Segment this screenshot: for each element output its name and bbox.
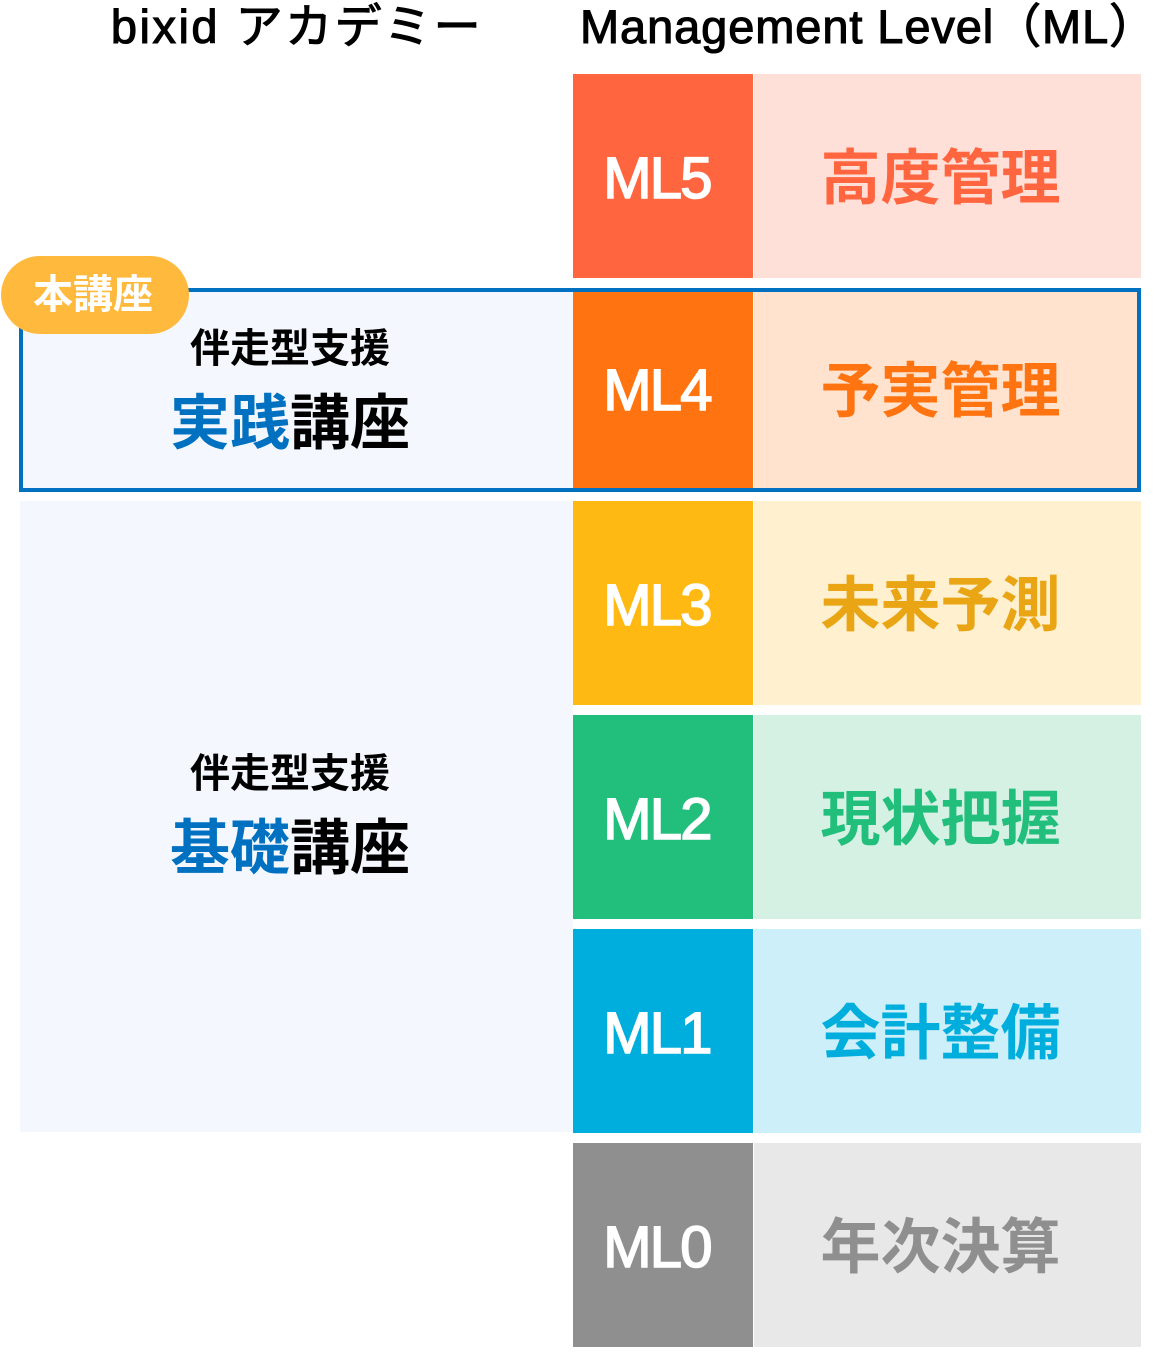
name: forecasting: 未来予測 [820,572,1060,639]
name: advanced management: 高度管理 [820,145,1060,212]
name: accounting maintenance [754,929,1141,1133]
subtitle: accompanying support: 伴走型支援 [190,327,390,371]
label: ML0 [573,1143,753,1347]
title: basic course: 基礎講座 [170,815,410,882]
name: accounting maintenance: 会計整備 [820,1000,1060,1067]
heading: management level: Management Level（ML） [580,0,1157,53]
label: ML1 [573,929,753,1133]
label: ML5: ML5 [603,146,711,211]
label: ML2 [573,715,753,919]
name: annual closing: 年次決算 [820,1214,1060,1281]
left panel: basic course background [20,501,573,1132]
name: annual closing [754,1143,1141,1347]
highlight frame around ML4 row [19,288,1141,492]
row: ML1 [573,929,1141,1133]
left panel: practical course background [20,292,573,489]
badge: this course [1,256,189,334]
badge: this course: 本講座 [33,273,153,317]
label: ML4: ML4 [603,358,711,423]
label: ML5 [573,74,753,278]
name: forecasting [754,501,1141,705]
label: ML1: ML1 [603,1001,711,1066]
subtitle: accompanying support: 伴走型支援 [190,752,390,796]
row: ML5 [573,74,1141,278]
label: ML3: ML3 [603,573,711,638]
row: ML3 [573,501,1141,705]
label: ML2: ML2 [603,787,711,852]
heading: bixid academy: bixid アカデミー [111,0,483,53]
row: ML2 [573,715,1141,919]
name: budget-actual management: 予実管理 [820,358,1060,425]
text: practical course [170,327,410,457]
name: budget-actual management [754,288,1141,492]
label: ML4 [573,288,753,492]
text: basic course [170,752,410,882]
name: situation grasp [754,715,1141,919]
label: ML0: ML0 [603,1215,711,1280]
name: situation grasp: 現状把握 [820,786,1060,853]
name: advanced management [754,74,1141,278]
title: practical course: 実践講座 [170,390,410,457]
row: ML0 [573,1143,1141,1347]
label: ML3 [573,501,753,705]
row: ML4 [573,292,1137,488]
